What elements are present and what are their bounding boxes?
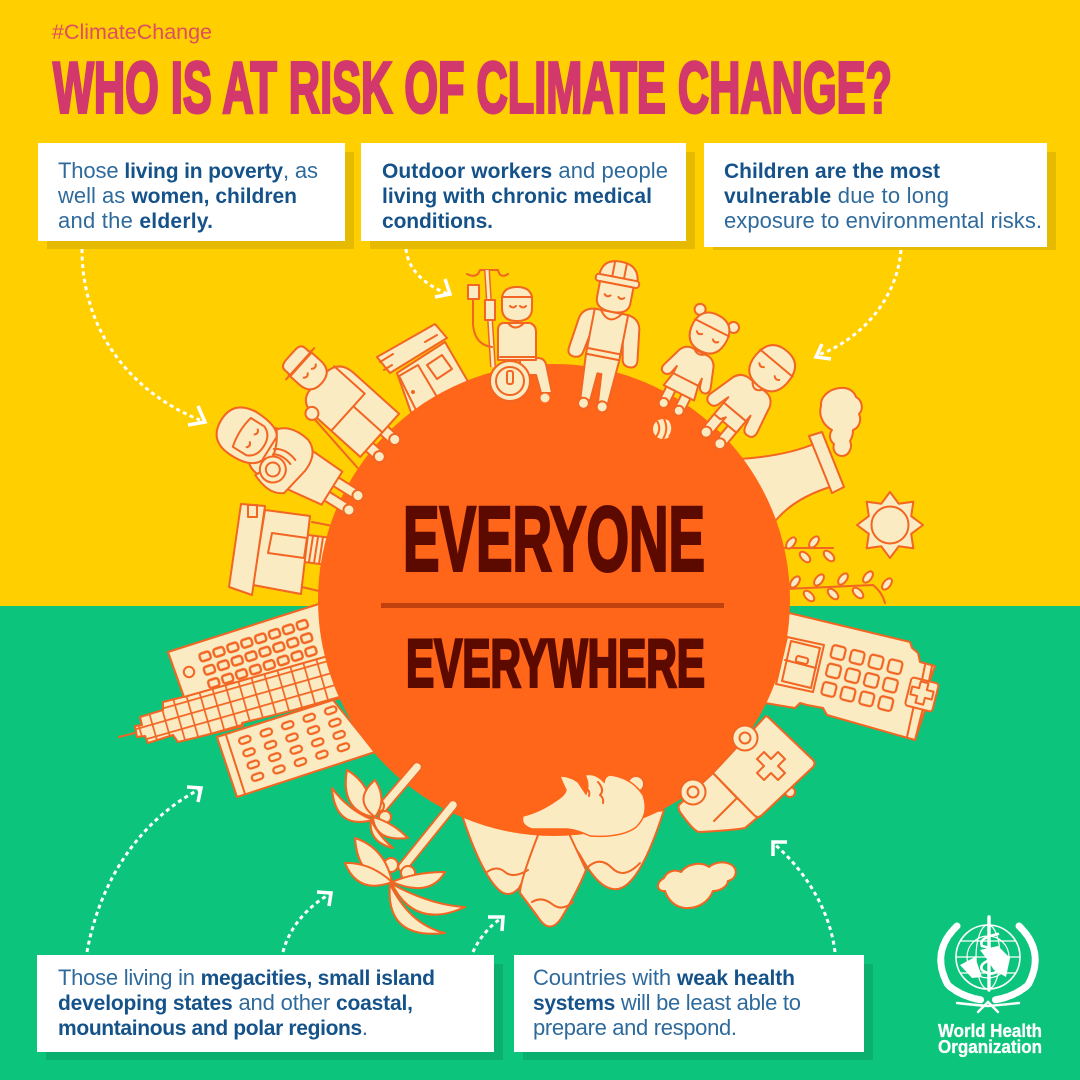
- text box: weak health systems: [514, 955, 873, 1060]
- text box: children: [704, 143, 1056, 250]
- arrow: health box to ambulance: [773, 842, 835, 952]
- text box: weak health systems: prepare and respond.: [533, 1015, 737, 1040]
- text box: outdoor workers: living with chronic medical: [382, 185, 652, 208]
- logo text: World Health Organization: [938, 1020, 1042, 1057]
- text box: outdoor workers: conditions.: [382, 210, 493, 233]
- text box: megacities: mountainous and polar regions.: [58, 1015, 368, 1040]
- icon: skyscraper city: [119, 602, 375, 797]
- text box: weak health systems: systems will be least able to: [533, 990, 801, 1015]
- central orange circle: [318, 364, 790, 836]
- icon: mountains: [462, 810, 664, 926]
- text box: children: vulnerable due to long: [724, 183, 949, 208]
- logo text: World Health Organization: World Health: [938, 1020, 1042, 1041]
- icon: ball: [653, 419, 673, 439]
- background: yellow upper half: [0, 0, 1080, 606]
- arrow: poverty box to mother: [82, 249, 205, 425]
- figure: girl: [646, 301, 743, 424]
- text box: poverty: Those living in poverty, as: [58, 158, 318, 183]
- text box: outdoor workers: [361, 143, 695, 249]
- text box: poverty: [38, 143, 354, 249]
- icon: smoke cloud: [820, 388, 862, 456]
- arrow: megacities box to city: [87, 787, 201, 952]
- icon: smokestack: [740, 432, 844, 560]
- icon: polar bear: [522, 774, 645, 836]
- icon: hospital: [765, 612, 939, 740]
- figure: mother with baby: [203, 394, 374, 534]
- text box: weak health systems: Countries with weak health: [533, 965, 795, 990]
- text box: megacities: [37, 955, 503, 1060]
- text box: outdoor workers: Outdoor workers and people: [382, 158, 668, 183]
- text box: poverty: and the elderly.: [58, 208, 213, 233]
- background: green lower half: [0, 606, 1080, 1080]
- text box: children: exposure to environmental risks.: [724, 208, 1042, 233]
- figure: elderly man: [264, 334, 414, 477]
- logo: World Health Organization emblem: [941, 917, 1035, 1012]
- icon: palm trees: [332, 767, 465, 934]
- icon: sun: [857, 492, 923, 558]
- figure: patient in wheelchair with IV stand: [467, 270, 552, 402]
- logo text: World Health Organization: Organization: [938, 1036, 1042, 1057]
- icon: cloud: [658, 862, 736, 908]
- icon: ambulance: [678, 716, 814, 832]
- figure: construction worker: [558, 255, 656, 417]
- text box: poverty: well as women, children: [57, 183, 297, 208]
- text box: children: Children are the most: [724, 160, 940, 183]
- figure: boy: [686, 331, 810, 462]
- icon: plants: [780, 535, 894, 603]
- heading: everyone: EVERYONE: [403, 488, 705, 590]
- arrow: island box to palms: [283, 892, 331, 952]
- arrow: children box to boy: [816, 250, 901, 359]
- divider rule: [381, 603, 724, 608]
- heading: everywhere: EVERYWHERE: [406, 626, 705, 702]
- text box: megacities: Those living in megacities, small island: [58, 965, 435, 990]
- arrow: mountain box to mountains: [473, 917, 503, 952]
- text box: megacities: developing states and other coastal,: [58, 990, 413, 1015]
- arrow: workers box to patient: [406, 249, 450, 297]
- icon: shop: [377, 324, 470, 418]
- icon: market stall: [229, 504, 333, 595]
- hashtag: #ClimateChange: [52, 21, 212, 44]
